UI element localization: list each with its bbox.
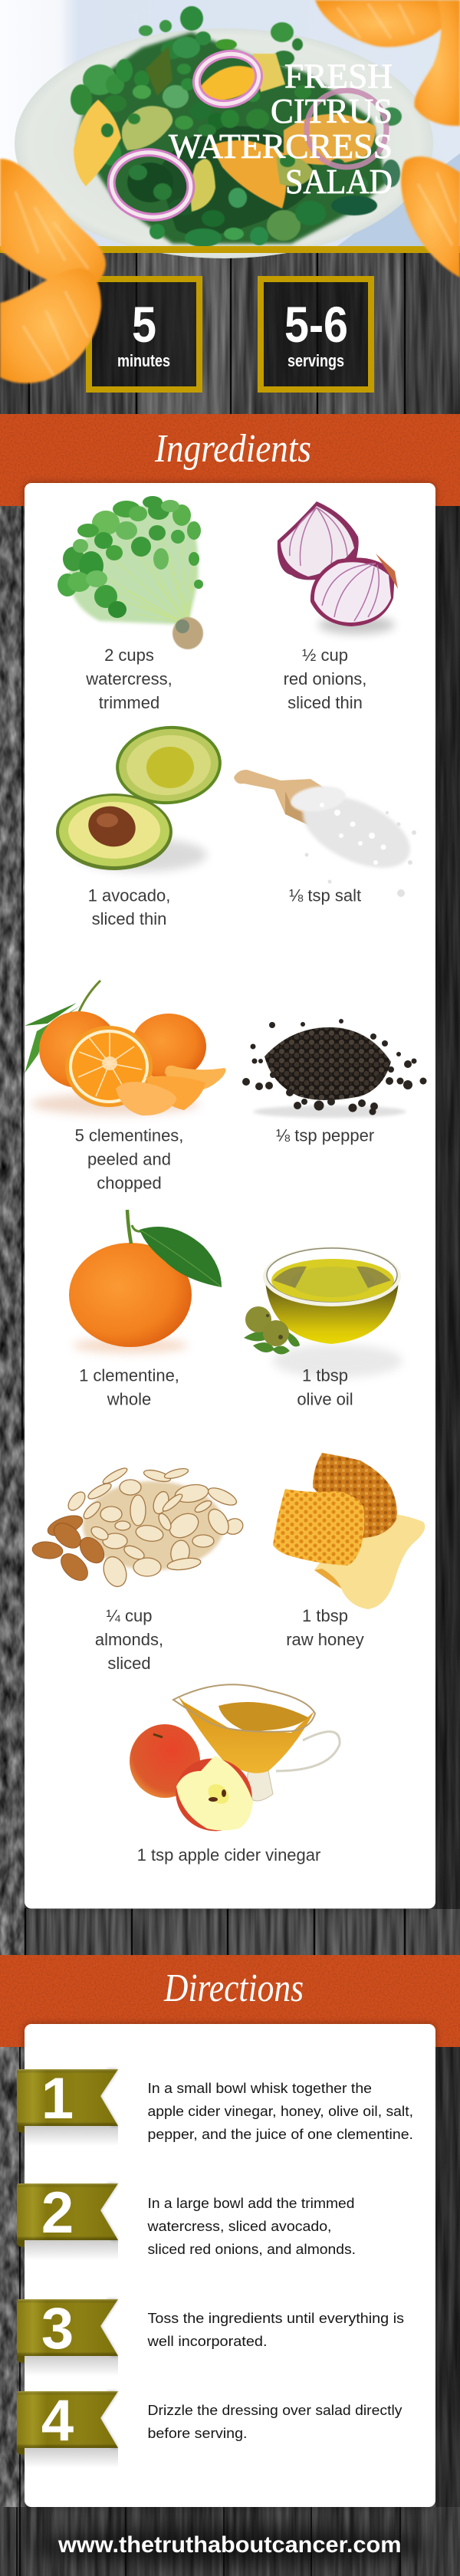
gold divider bbox=[0, 246, 460, 253]
watercress leaves bbox=[71, 6, 402, 247]
ribbon 1: 1 bbox=[41, 2066, 74, 2131]
ribbon 2 bbox=[17, 2180, 118, 2260]
label: sliced bbox=[107, 1654, 151, 1673]
ribbon 3 bbox=[17, 2296, 118, 2376]
label: trimmed bbox=[99, 693, 159, 712]
label: watercress, bbox=[85, 669, 172, 688]
ribbon 4: 4 bbox=[41, 2388, 74, 2453]
heading: Ingredients: Ingredients bbox=[154, 427, 311, 471]
label: red onions, bbox=[284, 669, 366, 688]
label: 1 tsp apple cider vinegar bbox=[137, 1845, 320, 1865]
ingredient: avocado bbox=[56, 721, 225, 928]
step 1: apple cider vinegar, honey, olive oil, salt, bbox=[147, 2103, 413, 2119]
step 3 bbox=[17, 2296, 404, 2376]
step 3: well incorporated. bbox=[146, 2333, 267, 2349]
label: ⅛ tsp pepper bbox=[276, 1125, 374, 1145]
step 2: watercress, sliced avocado, bbox=[146, 2218, 331, 2234]
panel: directions bbox=[17, 2024, 435, 2507]
label: chopped bbox=[97, 1173, 162, 1193]
label: ¼ cup bbox=[107, 1606, 152, 1625]
step 1 bbox=[17, 2066, 413, 2146]
step 2: In a large bowl add the trimmed bbox=[147, 2195, 354, 2211]
label: 1 avocado, bbox=[88, 886, 170, 905]
stat box: minutes: minutes bbox=[117, 351, 170, 370]
ribbon 2: 2 bbox=[41, 2180, 74, 2246]
label: 1 clementine, bbox=[79, 1366, 179, 1385]
label: olive oil bbox=[297, 1389, 353, 1409]
ingredient: red onions bbox=[278, 501, 398, 712]
title: FRESH bbox=[284, 57, 393, 95]
hero photo: salad plate bbox=[0, 0, 460, 258]
label: ⅛ tsp salt bbox=[289, 886, 361, 905]
ingredients banner bbox=[0, 414, 460, 506]
step 4: before serving. bbox=[147, 2425, 247, 2441]
label: 5 clementines, bbox=[75, 1125, 183, 1145]
step 1: pepper, and the juice of one clementine. bbox=[147, 2126, 413, 2142]
ingredient: clementines bbox=[25, 981, 226, 1193]
ingredient: salt bbox=[234, 770, 421, 905]
directions banner bbox=[0, 1955, 460, 2047]
ingredient: apple cider vinegar bbox=[130, 1684, 340, 1865]
onion rings bbox=[107, 48, 386, 222]
ribbon 4 bbox=[17, 2388, 118, 2468]
step 2: sliced red onions, and almonds. bbox=[147, 2241, 356, 2257]
label: peeled and bbox=[87, 1150, 171, 1168]
stat box: minutes bbox=[89, 279, 199, 389]
stat box: servings: 5-6 bbox=[284, 296, 348, 353]
ingredient: honey bbox=[273, 1453, 425, 1649]
footer website: www.thetruthaboutcancer.com bbox=[58, 2532, 401, 2558]
ingredient: pepper bbox=[242, 1019, 426, 1145]
label: raw honey bbox=[286, 1630, 364, 1649]
stat box: servings: servings bbox=[288, 351, 344, 370]
plate bbox=[15, 28, 433, 258]
stat box: servings bbox=[261, 279, 371, 389]
label: 1 tbsp bbox=[302, 1366, 348, 1385]
label: 2 cups bbox=[104, 646, 154, 665]
step 3: Toss the ingredients until everything is bbox=[147, 2310, 404, 2326]
title: SALAD bbox=[285, 162, 393, 201]
step 1: In a small bowl whisk together the bbox=[147, 2080, 372, 2096]
ingredient: watercress bbox=[58, 496, 203, 712]
floating mandarin segments bbox=[0, 0, 460, 383]
label: ½ cup bbox=[302, 646, 348, 665]
title: CITRUS bbox=[271, 91, 393, 130]
panel: ingredients bbox=[25, 483, 435, 1909]
ingredient: almonds bbox=[31, 1466, 245, 1673]
step 2 bbox=[17, 2180, 356, 2260]
label: sliced thin bbox=[92, 909, 166, 928]
heading: Directions: Directions bbox=[163, 1967, 304, 2010]
leaves over fruit bbox=[101, 64, 368, 191]
stat box: minutes: 5 bbox=[132, 296, 156, 353]
footer website bbox=[31, 2530, 429, 2564]
step 4 bbox=[17, 2388, 402, 2468]
label: 1 tbsp bbox=[302, 1606, 348, 1625]
label: almonds, bbox=[95, 1630, 163, 1649]
label: sliced thin bbox=[288, 693, 363, 712]
ribbon 1 bbox=[17, 2066, 118, 2146]
label: whole bbox=[107, 1389, 151, 1409]
orange and avocado pieces bbox=[74, 46, 376, 212]
title: WATERCRESS bbox=[169, 127, 393, 166]
title bbox=[169, 57, 393, 201]
ingredient: whole clementine bbox=[69, 1210, 222, 1409]
ingredient: olive oil bbox=[244, 1247, 402, 1409]
step 4: Drizzle the dressing over salad directly bbox=[147, 2402, 402, 2418]
ribbon 3: 3 bbox=[41, 2296, 74, 2361]
